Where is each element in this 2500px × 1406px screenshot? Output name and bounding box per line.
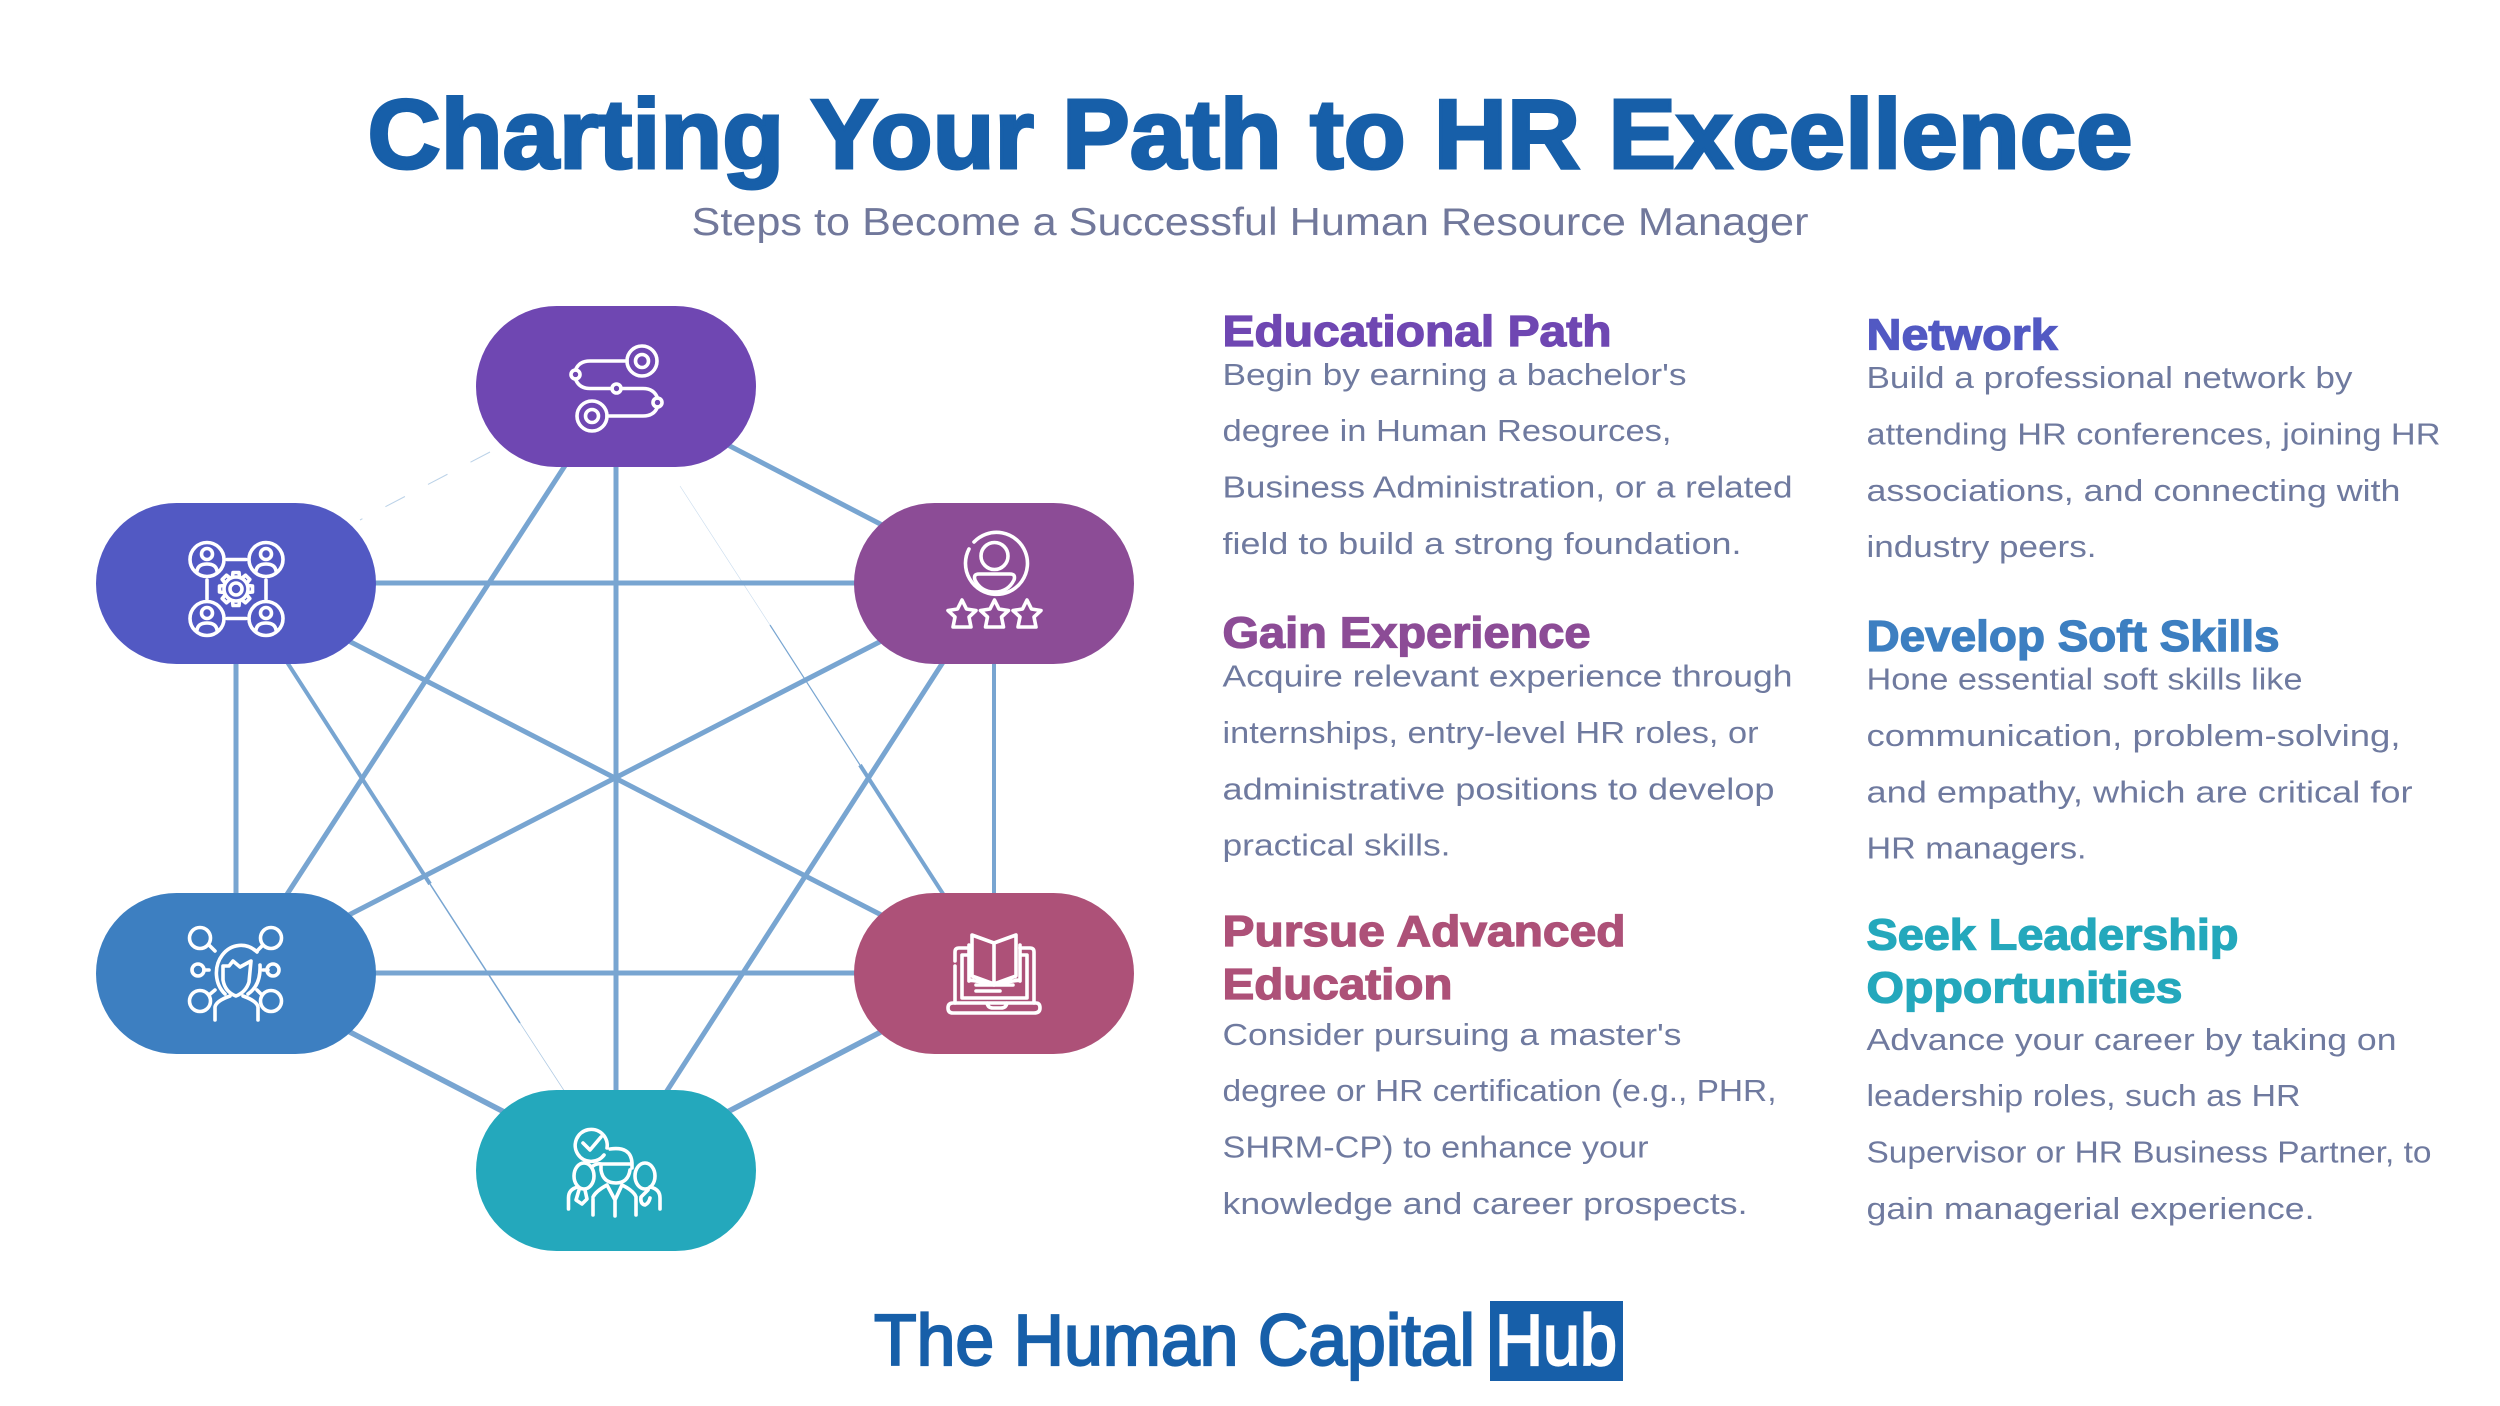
text block: Pursue Advanced Education: degree or HR certification (e.g., PHR, [1222, 1073, 1776, 1108]
text block: Seek Leadership Opportunities: gain managerial experience. [1866, 1191, 2314, 1226]
icon: winding path [571, 346, 662, 431]
text block: Gain Experience [1222, 608, 1792, 862]
text block: Develop Soft Skills: and empathy, which are critical for [1866, 774, 2412, 810]
text block: Network [1866, 310, 2440, 564]
icon: person with three stars [948, 532, 1041, 627]
text block: Network: industry peers. [1866, 529, 2096, 564]
text block: Gain Experience: administrative positions to develop [1222, 772, 1774, 806]
text block: Seek Leadership Opportunities: Supervisor or HR Business Partner, to [1866, 1134, 2432, 1170]
text block: Develop Soft Skills: Develop Soft Skills [1866, 612, 2280, 661]
text block: Educational Path [1222, 307, 1792, 561]
text block: Network: Network [1866, 310, 2058, 360]
node: rated employee pill [854, 503, 1134, 664]
text block: Gain Experience: Acquire relevant experience through [1222, 658, 1792, 694]
icon: person with connected circles [190, 928, 282, 1020]
icon: team with check badge [568, 1129, 660, 1216]
text block: Develop Soft Skills [1866, 612, 2412, 866]
text block: Educational Path: field to build a strong foundation. [1222, 526, 1742, 561]
node: network icon pill [96, 503, 376, 664]
network connector lines [236, 387, 994, 1170]
text block: Network: associations, and connecting with [1866, 473, 2400, 508]
text block: Develop Soft Skills: Hone essential soft skills like [1866, 662, 2302, 696]
title: Charting Your Path to HR Excellence [368, 79, 2132, 189]
text block: Educational Path: Begin by earning a bachelor's [1222, 357, 1686, 392]
text block: Pursue Advanced Education: Pursue Advanced [1222, 907, 1626, 956]
text block: Pursue Advanced Education: knowledge and career prospects. [1222, 1186, 1748, 1221]
node: soft skills pill [96, 893, 376, 1054]
text block: Develop Soft Skills: HR managers. [1866, 830, 2086, 866]
logo: The Human Capital Hub: The Human Capital [874, 1301, 1475, 1381]
text block: Develop Soft Skills: communication, problem-solving, [1866, 718, 2400, 753]
text block: Network: Build a professional network by [1866, 360, 2353, 395]
node: leadership pill [476, 1090, 756, 1251]
text block: Pursue Advanced Education: SHRM-CP) to enhance your [1222, 1130, 1648, 1164]
text block: Gain Experience: practical skills. [1222, 828, 1450, 862]
logo: The Human Capital Hub: Hub [1495, 1301, 1617, 1381]
text block: Seek Leadership Opportunities: leadership roles, such as HR [1866, 1078, 2300, 1113]
text block: Seek Leadership Opportunities [1866, 910, 2432, 1226]
node: advanced education pill [854, 893, 1134, 1054]
text block: Educational Path: degree in Human Resources, [1222, 413, 1672, 448]
text block: Network: attending HR conferences, joining HR [1866, 416, 2440, 452]
text block: Seek Leadership Opportunities: Advance your career by taking on [1866, 1022, 2396, 1057]
subtitle: Steps to Become a Successful Human Resource Manager [692, 201, 1808, 244]
text block: Gain Experience: internships, entry-level HR roles, or [1222, 715, 1758, 750]
text block: Seek Leadership Opportunities: Seek Leadership [1866, 910, 2238, 960]
text block: Educational Path: Business Administration, or a related [1222, 470, 1792, 504]
icon: people network with gear [190, 542, 283, 636]
text block: Pursue Advanced Education: Education [1222, 960, 1452, 1009]
text block: Seek Leadership Opportunities: Opportunities [1866, 964, 2182, 1012]
text block: Gain Experience: Gain Experience [1222, 608, 1590, 658]
text block: Pursue Advanced Education [1222, 907, 1776, 1221]
icon: open book on laptop [948, 935, 1040, 1013]
text block: Educational Path: Educational Path [1222, 307, 1612, 356]
text block: Pursue Advanced Education: Consider pursuing a master's [1222, 1017, 1682, 1052]
node: path icon pill [476, 306, 756, 467]
